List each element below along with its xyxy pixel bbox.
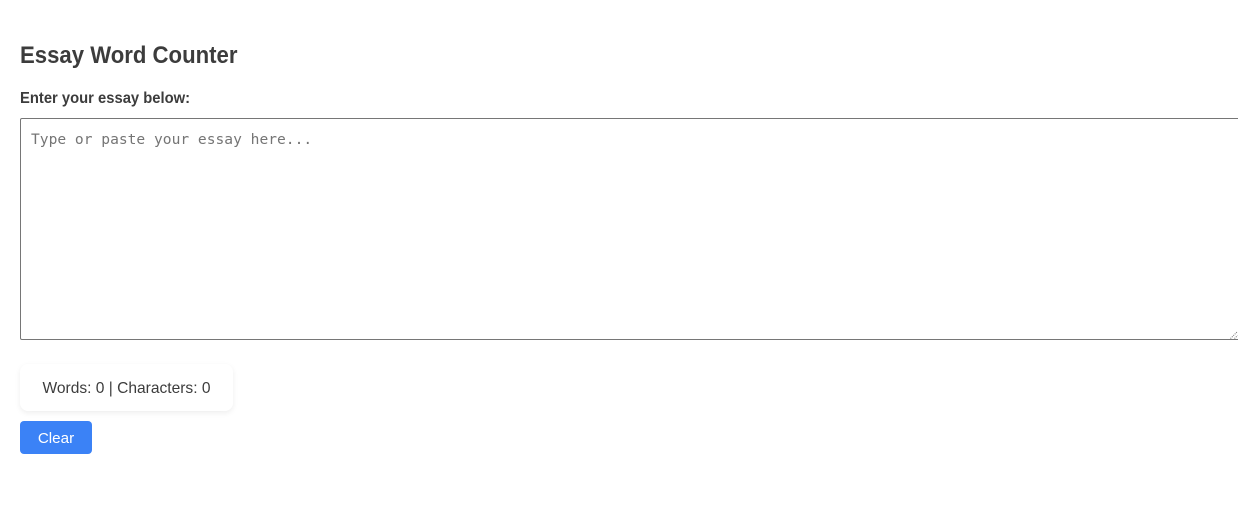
- title: Essay Word Counter: [20, 42, 237, 69]
- icon: resize handle: [1230, 332, 1238, 339]
- placeholder text: Type or paste your essay here...: [31, 131, 312, 148]
- essay text area: [20, 118, 1238, 340]
- button label: Clear: [38, 430, 74, 447]
- textarea label: Enter your essay below:: [20, 90, 190, 107]
- word and character count card: [20, 364, 233, 411]
- clear button: [20, 421, 92, 454]
- count text: Words: 0 | Characters: 0: [43, 380, 210, 397]
